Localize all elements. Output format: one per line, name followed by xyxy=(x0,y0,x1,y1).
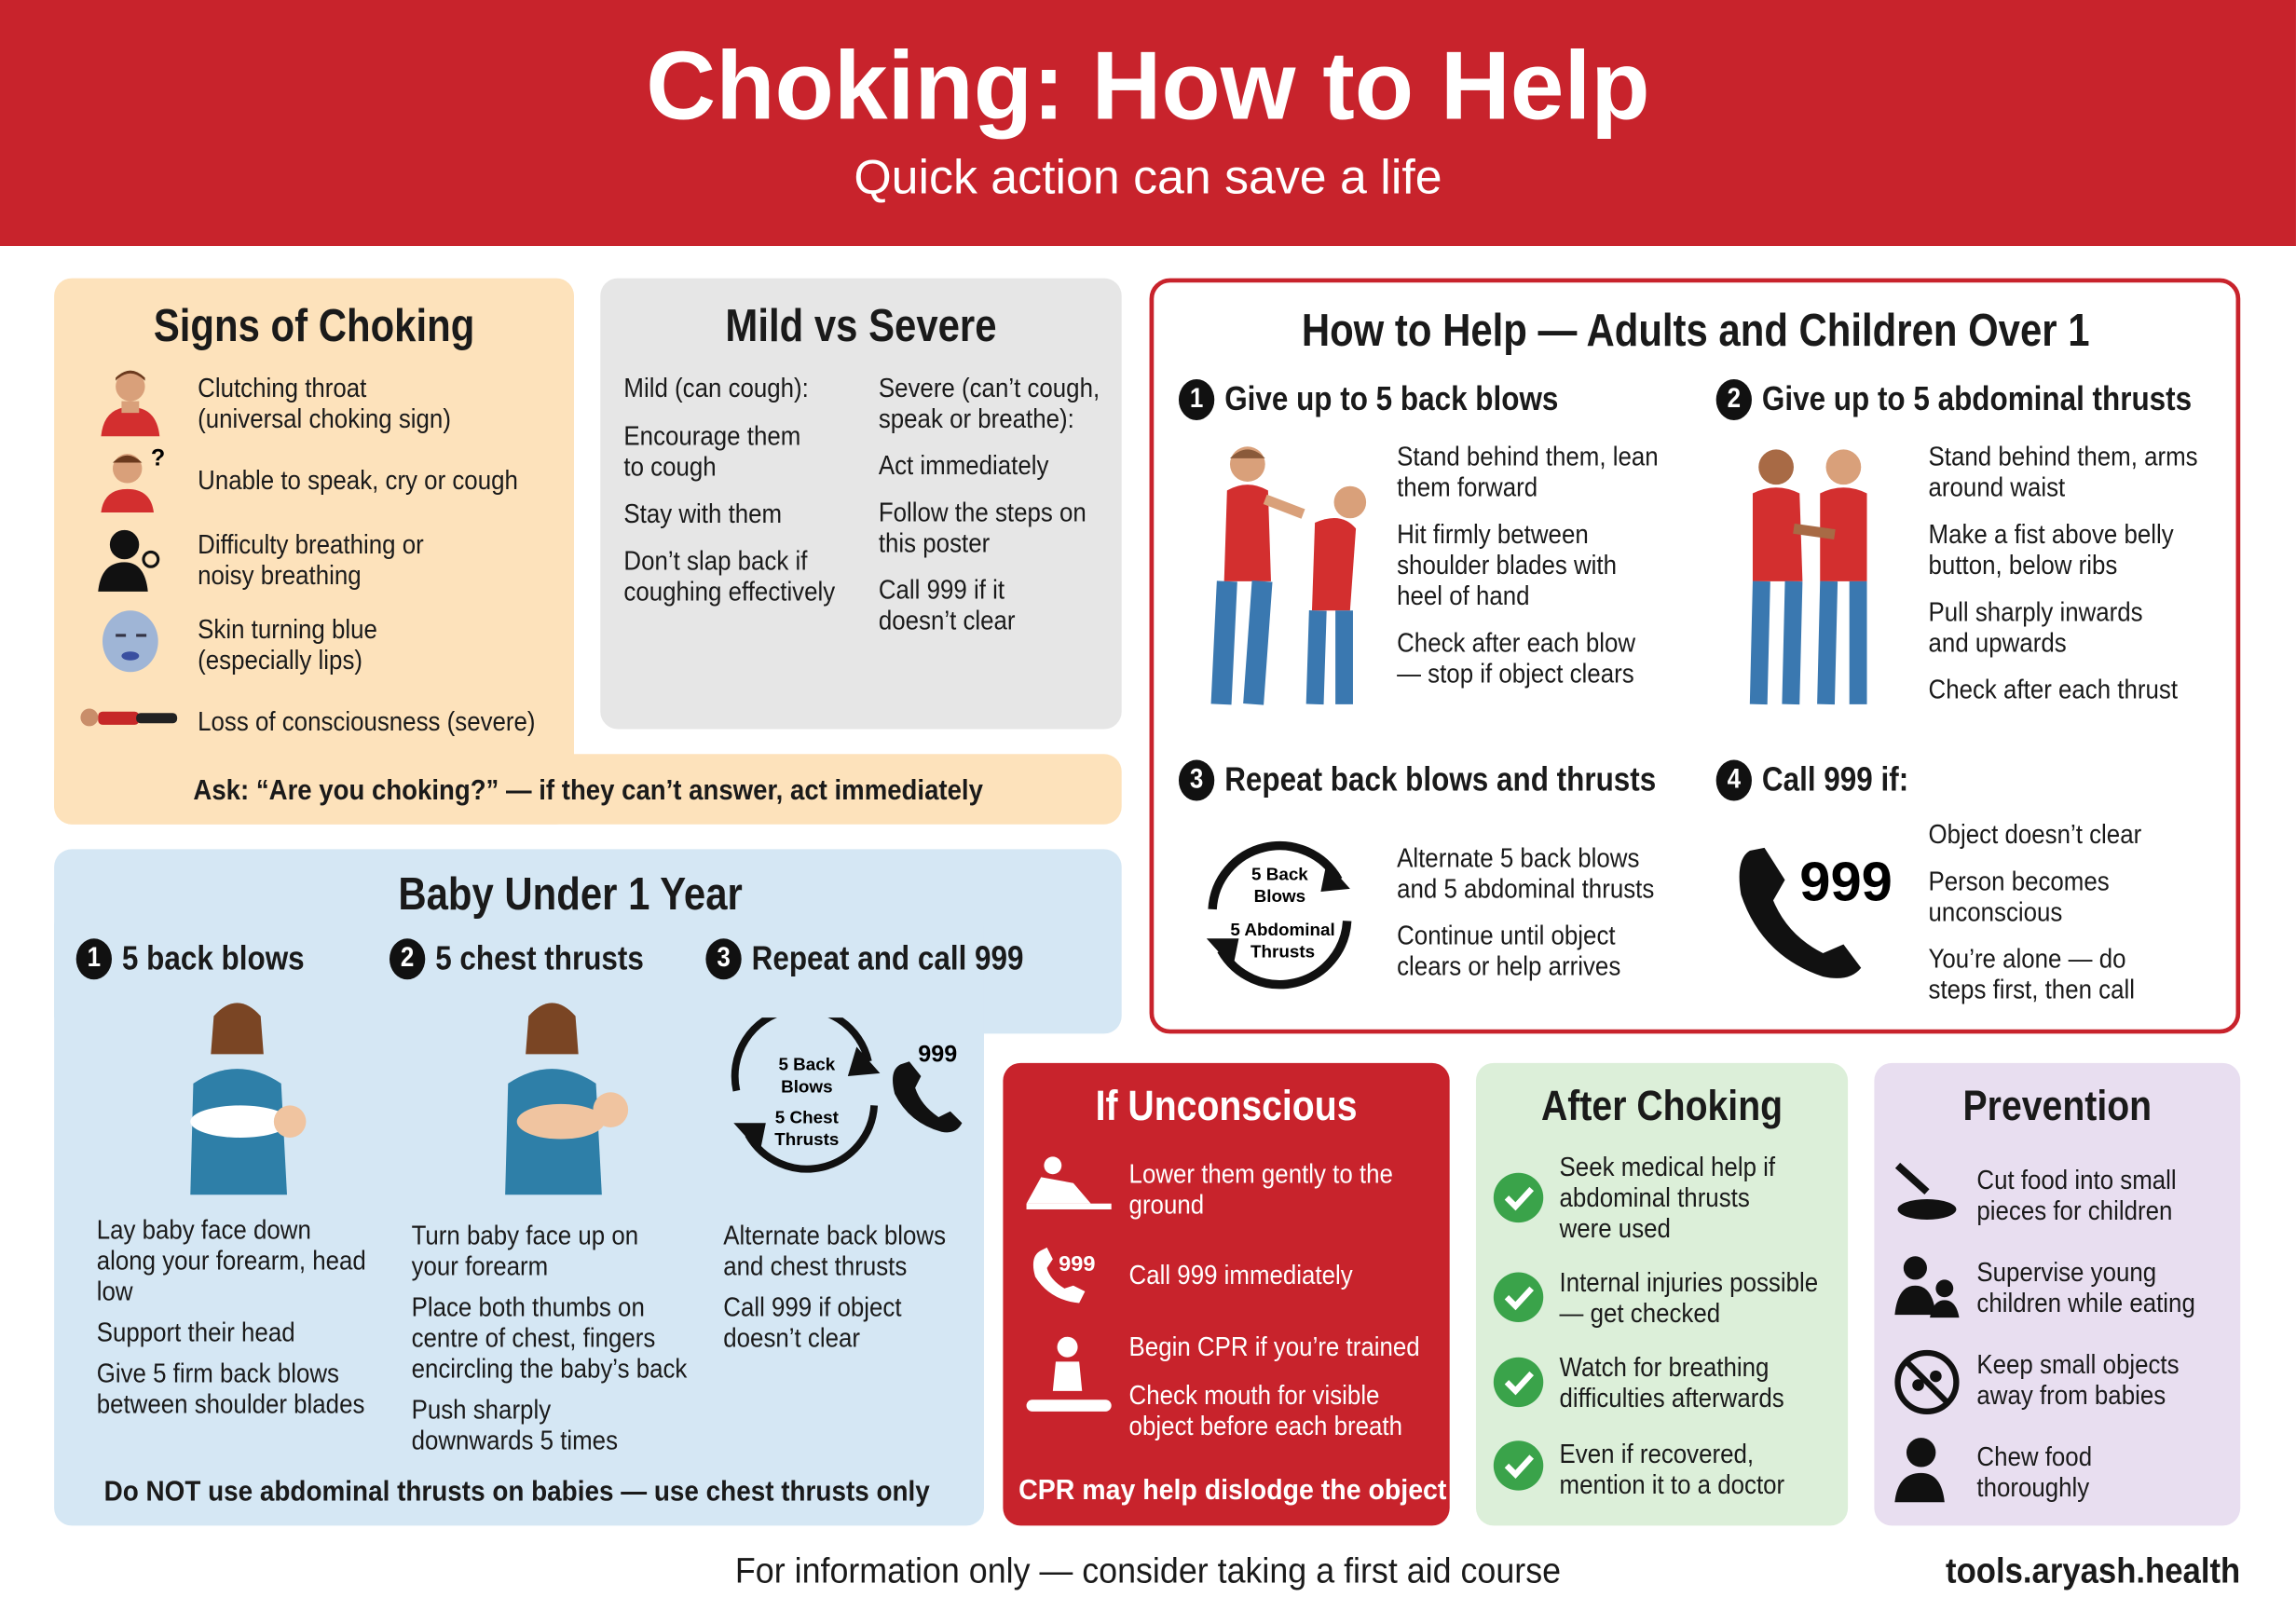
text: step 2: around waist xyxy=(1929,471,2065,502)
mild column: Don’t slap back if xyxy=(623,545,807,576)
text: step 2: and upwards xyxy=(1929,627,2067,658)
title: Choking: How to Help xyxy=(646,31,1650,139)
mild column xyxy=(623,372,835,607)
panel: signs of choking xyxy=(54,278,1122,825)
panel: signs of choking: (especially lips) xyxy=(198,644,362,675)
icon: cycle: 5 Back xyxy=(1251,864,1308,883)
icon: cycle xyxy=(1206,840,1351,990)
step 4: Call 999 if: xyxy=(1762,760,1908,798)
icon: no small objects xyxy=(1894,1349,1960,1414)
text: step 4: steps first, then call xyxy=(1929,974,2135,1004)
check items: Seek medical help if xyxy=(1560,1151,1775,1181)
text: baby step 3: Call 999 if object xyxy=(723,1291,902,1322)
panel: how to help adults: How to Help — Adults and Children Over 1 xyxy=(1302,305,2090,356)
text: step 1: Hit firmly between xyxy=(1397,518,1589,549)
panel: signs of choking: Clutching throat xyxy=(198,372,366,403)
icon: lying person xyxy=(80,708,177,727)
panel: if unconscious: object before each breath xyxy=(1129,1410,1402,1440)
text: baby step 2: your forearm xyxy=(412,1250,548,1281)
icon: chew food xyxy=(1894,1438,1945,1502)
panel: prevention: pieces for children xyxy=(1976,1195,2172,1225)
panel: mild vs severe xyxy=(600,279,1122,730)
icon: difficulty breathing xyxy=(98,529,160,592)
severe column: this poster xyxy=(879,527,990,558)
panel: after choking: After Choking xyxy=(1541,1084,1783,1130)
text: baby step 1: low xyxy=(97,1276,133,1306)
baby step 3: 3 xyxy=(717,943,731,974)
step 2: 2 xyxy=(1728,384,1741,415)
text: baby step 2: Place both thumbs on xyxy=(412,1291,645,1322)
panel: prevention: Supervise young xyxy=(1976,1256,2156,1287)
mild column: coughing effectively xyxy=(623,576,835,607)
callout: ask: Ask: “Are you choking?” — if they can’t answer, act immediately xyxy=(193,774,983,807)
step 3: 3 xyxy=(1190,764,1203,795)
icon: baby cycle 999 xyxy=(731,1017,962,1173)
panel: if unconscious: If Unconscious xyxy=(1096,1084,1357,1130)
severe column: Call 999 if it xyxy=(879,574,1004,605)
icon: unable to speak: ? xyxy=(151,445,165,471)
panel: signs of choking: (universal choking sign) xyxy=(198,403,451,433)
text: step 1: heel of hand xyxy=(1397,580,1530,610)
icon: cut food xyxy=(1895,1163,1957,1220)
callout: CPR: CPR may help dislodge the object xyxy=(1018,1474,1446,1507)
icon: back blows figures xyxy=(1211,446,1366,705)
panel: prevention xyxy=(1874,1063,2240,1525)
icon: baby cycle 999: 5 Back xyxy=(778,1055,836,1074)
text: step 3: Continue until object xyxy=(1397,920,1616,950)
icon: baby cycle 999: 999 xyxy=(918,1041,957,1067)
check items: were used xyxy=(1560,1212,1671,1243)
icon: phone 999 xyxy=(1739,848,1893,978)
check items: — get checked xyxy=(1560,1297,1720,1328)
severe column: speak or breathe): xyxy=(879,403,1074,433)
check items: Watch for breathing xyxy=(1560,1351,1769,1382)
panel: prevention: Keep small objects xyxy=(1976,1348,2180,1379)
check items: mention it to a doctor xyxy=(1560,1468,1784,1499)
panel: signs of choking: Unable to speak, cry or cough xyxy=(198,464,518,495)
step 1: Give up to 5 back blows xyxy=(1224,379,1558,417)
panel: baby under 1 year xyxy=(54,849,1122,1526)
text: step 4: Object doesn’t clear xyxy=(1929,818,2141,849)
panel: signs of choking: Difficulty breathing or xyxy=(198,528,424,559)
check items: difficulties afterwards xyxy=(1560,1382,1784,1413)
text: baby step 2: centre of chest, fingers xyxy=(412,1322,655,1353)
text: step 2: Pull sharply inwards xyxy=(1929,596,2143,627)
panel: if unconscious: Begin CPR if you’re trained xyxy=(1129,1331,1420,1361)
icon: lowering person xyxy=(1027,1156,1112,1209)
panel: prevention: Chew food xyxy=(1976,1440,2092,1471)
check items xyxy=(1493,1151,1818,1499)
icon: blue face xyxy=(102,610,158,673)
panel: if unconscious: Check mouth for visible xyxy=(1129,1379,1379,1410)
text: baby step 3: Alternate back blows xyxy=(723,1220,946,1250)
baby step 3: Repeat and call 999 xyxy=(752,938,1024,976)
text: step 1: — stop if object clears xyxy=(1397,658,1634,689)
icon: abdominal thrusts figures xyxy=(1750,449,1867,704)
panel: prevention: Prevention xyxy=(1963,1084,2152,1130)
severe column: doesn’t clear xyxy=(879,605,1016,635)
baby step 1: 5 back blows xyxy=(122,938,305,976)
text: step 2: Make a fist above belly xyxy=(1929,518,2174,549)
mild column: Mild (can cough): xyxy=(623,372,809,403)
text: baby step 3 xyxy=(723,1220,946,1353)
mild column: Encourage them xyxy=(623,420,800,451)
text: step 2: Stand behind them, arms xyxy=(1929,441,2198,471)
text: step 2 xyxy=(1929,441,2198,704)
icon: CPR xyxy=(1027,1336,1112,1412)
callout: baby warning: Do NOT use abdominal thrusts on babies — use chest thrusts only xyxy=(104,1476,930,1509)
icon: unable to speak xyxy=(101,445,165,512)
baby step 1: 1 xyxy=(88,943,101,974)
footer note: For information only — consider taking a first aid course xyxy=(735,1552,1561,1591)
check items: Even if recovered, xyxy=(1560,1438,1754,1468)
icon: baby cycle 999: Thrusts xyxy=(774,1129,839,1149)
severe column: Severe (can’t cough, xyxy=(879,372,1100,403)
text: step 4: You’re alone — do xyxy=(1929,943,2125,974)
icon: cycle: Blows xyxy=(1254,886,1305,906)
mild column: Stay with them xyxy=(623,498,782,528)
icon: baby chest thrusts xyxy=(505,1003,628,1195)
check items: abdominal thrusts xyxy=(1560,1181,1750,1212)
panel: if unconscious xyxy=(1003,1063,1450,1525)
text: step 1: Stand behind them, lean xyxy=(1397,441,1659,471)
text: step 3: clears or help arrives xyxy=(1397,950,1620,981)
icon: baby back blows xyxy=(190,1003,306,1195)
panel: prevention: away from babies xyxy=(1976,1379,2166,1410)
text: baby step 3: doesn’t clear xyxy=(723,1322,860,1353)
mild column: to cough xyxy=(623,451,717,482)
text: baby step 2: Turn baby face up on xyxy=(412,1220,638,1250)
baby step 2: 2 xyxy=(401,943,414,974)
panel: if unconscious: ground xyxy=(1129,1189,1204,1220)
panel: prevention: children while eating xyxy=(1976,1287,2195,1317)
panel: how to help adults xyxy=(1150,279,2240,1033)
panel: mild vs severe: Mild vs Severe xyxy=(725,300,997,351)
severe column: Act immediately xyxy=(879,449,1048,480)
text: baby step 2: downwards 5 times xyxy=(412,1425,618,1455)
text: step 3: and 5 abdominal thrusts xyxy=(1397,873,1654,904)
severe column: Follow the steps on xyxy=(879,497,1086,527)
icon: baby cycle 999: 5 Chest xyxy=(775,1107,840,1126)
panel: signs of choking: Skin turning blue xyxy=(198,613,377,644)
text: baby step 1: Support their head xyxy=(97,1317,295,1347)
severe column xyxy=(879,372,1100,635)
text: step 1 xyxy=(1397,441,1659,689)
text: baby step 1: Lay baby face down xyxy=(97,1214,311,1245)
panel: if unconscious: Call 999 immediately xyxy=(1129,1259,1353,1290)
icon: cycle: 5 Abdominal xyxy=(1230,920,1335,939)
icon: cycle: Thrusts xyxy=(1250,942,1315,962)
baby step 2: 5 chest thrusts xyxy=(435,938,644,976)
icon: baby cycle 999: Blows xyxy=(781,1076,833,1096)
check items: Internal injuries possible xyxy=(1560,1266,1818,1297)
panel: signs of choking: Loss of consciousness (severe) xyxy=(198,705,536,736)
icon: supervise xyxy=(1894,1256,1959,1317)
text: baby step 1: between shoulder blades xyxy=(97,1388,364,1419)
panel: after choking xyxy=(1476,1063,1848,1525)
step 4: 4 xyxy=(1728,764,1741,795)
text: step 1: shoulder blades with xyxy=(1397,549,1617,580)
text: baby step 2: encircling the baby’s back xyxy=(412,1353,687,1384)
text: baby step 2: Push sharply xyxy=(412,1394,551,1425)
text: step 1: them forward xyxy=(1397,471,1538,502)
text: step 2: Check after each thrust xyxy=(1929,674,2178,704)
subtitle: Quick action can save a life xyxy=(854,149,1442,203)
text: step 4: Person becomes xyxy=(1929,866,2110,896)
header xyxy=(0,0,2296,246)
text: baby step 3: and chest thrusts xyxy=(723,1250,907,1281)
icon: phone 999: 999 xyxy=(1799,850,1893,912)
text: baby step 1: along your forearm, head xyxy=(97,1245,366,1276)
panel: prevention: thoroughly xyxy=(1976,1471,2089,1502)
text: baby step 1 xyxy=(97,1214,366,1419)
text: step 3 xyxy=(1397,842,1654,981)
panel: if unconscious: Lower them gently to the xyxy=(1129,1158,1393,1189)
footer url: tools.aryash.health xyxy=(1946,1552,2240,1591)
panel: signs of choking: noisy breathing xyxy=(198,559,362,590)
panel: signs of choking: Signs of Choking xyxy=(154,300,474,351)
text: baby step 2 xyxy=(412,1220,688,1455)
text: step 4: unconscious xyxy=(1929,896,2062,927)
text: step 3: Alternate 5 back blows xyxy=(1397,842,1639,873)
text: step 4 xyxy=(1929,818,2141,1004)
icon: clutching throat xyxy=(101,371,160,436)
text: baby step 1: Give 5 firm back blows xyxy=(97,1358,339,1388)
panel: baby under 1 year: Baby Under 1 Year xyxy=(398,868,743,920)
text: step 2: button, below ribs xyxy=(1929,549,2117,580)
text: step 1: Check after each blow xyxy=(1397,627,1635,658)
step 2: Give up to 5 abdominal thrusts xyxy=(1762,379,2192,417)
step 3: Repeat back blows and thrusts xyxy=(1224,760,1656,798)
panel: prevention: Cut food into small xyxy=(1976,1164,2177,1195)
icon: phone 999: 999 xyxy=(1059,1251,1095,1276)
step 1: 1 xyxy=(1190,384,1203,415)
icon: phone 999 xyxy=(1032,1247,1095,1303)
